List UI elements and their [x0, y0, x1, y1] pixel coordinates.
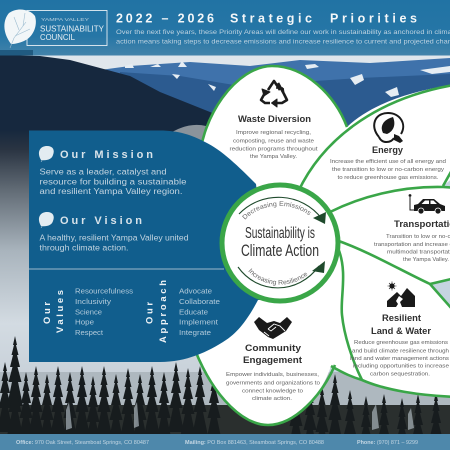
title: 2022 – 2026	[116, 12, 214, 26]
list: approach: Collaborate	[179, 297, 220, 306]
heading: resilient land and water: Resilient	[382, 313, 422, 324]
heading: our approach: Our	[144, 302, 155, 324]
footer: contact details: Phone: (970) 871 – 9299	[357, 440, 418, 446]
central circle: sustainability is climate action	[220, 182, 340, 304]
text: transportation description	[374, 234, 450, 263]
icon: recycling arrows	[261, 81, 287, 107]
petal: waste diversion	[198, 66, 347, 175]
list: values	[75, 287, 133, 337]
heading: our values: Our	[41, 302, 52, 324]
heading: waste diversion: Waste Diversion	[238, 114, 311, 125]
footer: contact details	[0, 434, 450, 450]
arc label: decreasing emissions: Decreasing Emissions	[242, 201, 310, 220]
text: community description: connect knowledge to	[242, 389, 304, 395]
text: resilient description: carbon sequestration.	[370, 371, 430, 377]
list: approach: Implement	[179, 318, 218, 327]
icon: leaf with plug	[374, 113, 403, 143]
text: community description: Empower individuals, businesses,	[226, 372, 319, 378]
logo: aspen leaf and council name: COUNCIL	[40, 32, 75, 42]
icon: mission leaf	[39, 146, 54, 162]
text: mission statement: Serve as a leader, catalyst and	[40, 167, 166, 176]
text: waste diversion description: Improve regional recycling,	[236, 130, 311, 136]
footer: contact details: Mailing: PO Box 881463, Steamboat Springs, CO 80488	[185, 440, 324, 446]
logo: aspen leaf and council name	[4, 9, 107, 48]
list: values: Inclusivity	[75, 297, 111, 306]
list: approach	[179, 287, 220, 337]
heading: sustainability is climate action: Climate Action	[241, 242, 319, 260]
list: values: Respect	[75, 328, 103, 337]
text: energy description	[330, 159, 446, 181]
text: vision statement	[40, 234, 188, 253]
heading: our vision: Our Vision	[60, 215, 142, 227]
text: community description	[226, 372, 321, 402]
icon: handshake	[254, 317, 292, 339]
heading: energy: Energy	[372, 145, 404, 156]
heading: community engagement	[243, 343, 303, 366]
list: approach: Advocate	[179, 287, 212, 296]
petal: energy	[298, 84, 450, 192]
text: resilient description: Reduce greenhouse gas emissions	[354, 340, 448, 346]
arrow: increasing resilience	[238, 261, 325, 288]
dark forest hillside	[0, 55, 225, 150]
panel: mission, vision, values, approach	[29, 130, 270, 362]
icon: sun over mountains	[387, 282, 415, 307]
petal: community engagement	[195, 317, 335, 425]
heading: resilient land and water: Land & Water	[371, 326, 431, 337]
icon: vision leaf	[39, 212, 54, 228]
heading: our approach	[144, 280, 168, 343]
title	[116, 12, 417, 26]
bottom tree line	[0, 336, 450, 450]
heading: our values: Values	[54, 290, 65, 333]
text: vision statement: through climate action.	[40, 244, 128, 253]
text: waste diversion description: the Yampa Valley.	[250, 154, 297, 160]
text: waste diversion description: composting, reuse and waste	[233, 138, 315, 144]
logo: aspen leaf and council name: YAMPA VALLEY	[41, 17, 89, 22]
text: energy description: the transition to low or no-carbon energy	[332, 167, 444, 173]
text: resilient description: land and water management actions	[350, 356, 449, 362]
petal: transportation	[330, 187, 450, 284]
text: energy description: Increase the efficient use of all energy and	[330, 159, 446, 165]
logo: aspen leaf and council name: SUSTAINABILITY	[40, 24, 104, 34]
text: introduction	[116, 29, 450, 46]
list: values: Hope	[75, 318, 94, 327]
arrow: decreasing emissions	[239, 197, 326, 224]
list: values: Resourcefulness	[75, 287, 133, 296]
text: waste diversion description	[230, 130, 318, 160]
footer: contact details: Office: 970 Oak Street, Steamboat Springs, CO 80487	[16, 440, 149, 446]
heading: community engagement: Community	[245, 343, 302, 354]
white petal area behind the priorities	[195, 66, 450, 425]
heading: community engagement: Engagement	[243, 355, 303, 366]
text: vision statement: A healthy, resilient Yampa Valley united	[40, 234, 188, 243]
list: values: Science	[75, 307, 102, 316]
petal: resilient land and water	[331, 248, 450, 397]
text: community description: climate action.	[252, 396, 292, 402]
title: Priorities	[330, 12, 417, 26]
heading: our approach: Approach	[157, 280, 168, 343]
list: approach: Integrate	[179, 328, 211, 337]
text: transportation description: the Yampa Valley.	[403, 257, 449, 263]
text: resilient description: and build climate resilience through	[352, 348, 449, 354]
title: Strategic	[230, 12, 312, 26]
list: approach: Educate	[179, 307, 208, 316]
text: introduction: action means taking steps to decrease emissions and increase resilience to current and projected change	[116, 38, 450, 46]
heading: resilient land and water	[371, 313, 431, 337]
text: mission statement	[40, 167, 187, 196]
text: introduction: Over the next five years, these Priority Areas will define our work in sustainability as anchored in climate	[116, 29, 450, 36]
heading: our mission: Our Mission	[60, 149, 153, 161]
text: resilient description	[350, 340, 450, 377]
heading: sustainability is climate action: Sustainability is	[245, 225, 315, 242]
text: resilient description: including opportunities to increase	[353, 364, 450, 370]
text: energy description: to reduce greenhouse gas emissions.	[338, 175, 439, 181]
arc label: increasing resilience: Increasing Resilience	[248, 268, 308, 286]
text: waste diversion description: reduction programs throughout	[230, 146, 318, 152]
text: community description: governments and organizations to	[226, 381, 321, 387]
text: mission statement: resource for building a sustainable	[40, 177, 187, 186]
heading: our values	[41, 290, 65, 333]
text: mission statement: and resilient Yampa Valley region.	[40, 187, 182, 196]
heading: sustainability is climate action	[241, 225, 319, 260]
header band	[0, 0, 450, 56]
icon: electric car	[409, 194, 445, 214]
